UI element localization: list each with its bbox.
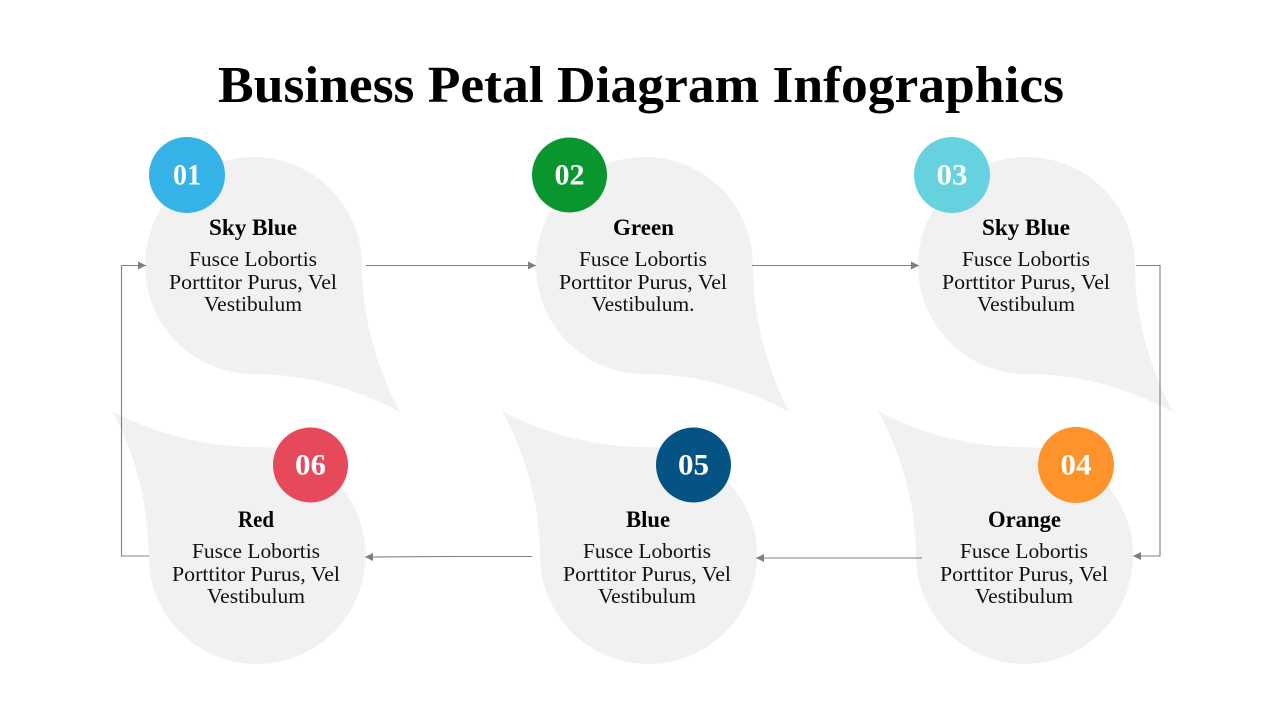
body text 06: Porttitor Purus, Vel — [172, 562, 340, 586]
title: Business Petal Diagram Infographics — [218, 57, 1064, 114]
body text 04 — [940, 539, 1108, 608]
panel: step 04 — [878, 411, 1133, 664]
heading 01: Sky Blue — [209, 215, 297, 240]
body text 06: Fusce Lobortis — [192, 539, 320, 563]
body text 02: Fusce Lobortis — [579, 247, 707, 271]
petal 03 — [918, 157, 1173, 412]
number badge 02: 02 — [554, 158, 584, 192]
petal 02 — [536, 157, 789, 412]
number badge 03 — [914, 137, 990, 213]
heading 03: Sky Blue — [982, 215, 1070, 240]
heading 06: Red — [238, 507, 274, 532]
body text 02: Vestibulum. — [592, 292, 694, 316]
petal 04 — [878, 411, 1133, 664]
heading 04: Orange — [988, 507, 1061, 532]
panel: step 02 — [532, 138, 789, 412]
body text 03 — [942, 247, 1110, 316]
number badge 03: 03 — [936, 158, 968, 192]
body text 04: Vestibulum — [975, 584, 1073, 608]
arrow: 05 to 06 — [365, 556, 532, 558]
number badge 01 — [149, 137, 225, 213]
heading 02: Green — [613, 215, 674, 240]
arrow: 02 to 03 — [752, 264, 919, 266]
body text 04: Fusce Lobortis — [960, 539, 1088, 563]
panel: step 01 — [145, 137, 400, 412]
heading 05: Blue — [626, 507, 670, 532]
body text 03: Porttitor Purus, Vel — [942, 270, 1110, 294]
body text 03: Vestibulum — [977, 292, 1075, 316]
arrow: 03 to 04 — [1133, 266, 1160, 556]
body text 05: Fusce Lobortis — [583, 539, 711, 563]
body text 05: Porttitor Purus, Vel — [563, 562, 731, 586]
arrow: 04 to 05 — [756, 557, 921, 558]
body text 04: Porttitor Purus, Vel — [940, 562, 1108, 586]
body text 05: Vestibulum — [598, 584, 696, 608]
number badge 06: 06 — [295, 448, 326, 482]
number badge 04: 04 — [1060, 448, 1092, 482]
number badge 05: 05 — [678, 448, 709, 482]
body text 06: Vestibulum — [207, 584, 305, 608]
body text 03: Fusce Lobortis — [962, 247, 1090, 271]
petal 05 — [502, 411, 757, 664]
arrow: 01 to 02 — [366, 264, 536, 266]
body text 02: Porttitor Purus, Vel — [559, 270, 727, 294]
petal 06 — [112, 411, 366, 664]
panel: step 05 — [502, 411, 757, 664]
panel: step 03 — [914, 137, 1173, 412]
number badge 01: 01 — [173, 158, 201, 192]
body text 06 — [172, 539, 340, 608]
body text 01 — [169, 247, 337, 316]
panel: step 06 — [112, 411, 366, 664]
body text 05 — [563, 539, 731, 608]
petal 01 — [145, 157, 400, 412]
arrow: 06 to 01 — [122, 266, 149, 556]
body text 02 — [559, 247, 727, 316]
number badge 02 — [532, 138, 607, 212]
body text 01: Porttitor Purus, Vel — [169, 270, 337, 294]
number badge 06 — [273, 428, 348, 502]
number badge 04 — [1038, 427, 1114, 503]
body text 01: Fusce Lobortis — [189, 247, 317, 271]
body text 01: Vestibulum — [204, 292, 302, 316]
number badge 05 — [656, 428, 731, 502]
